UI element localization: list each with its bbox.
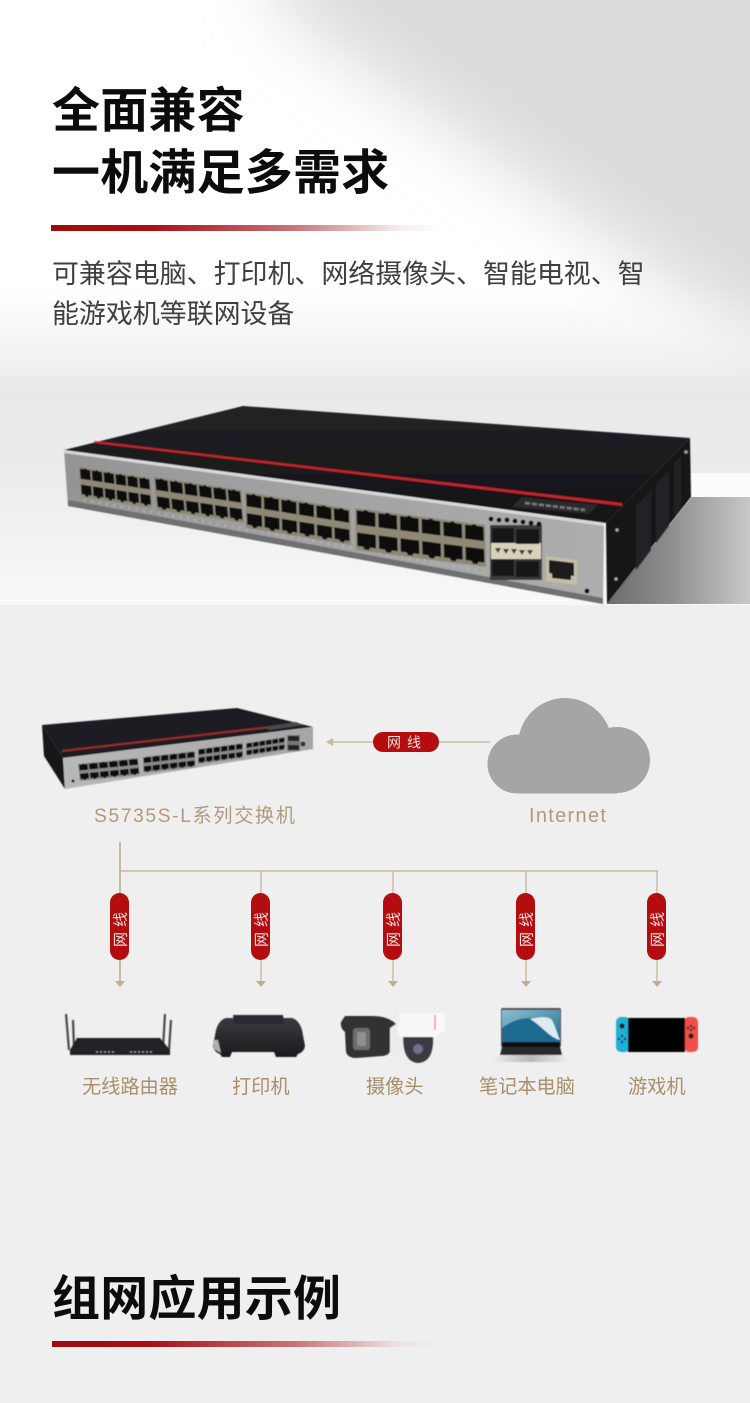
title: 一机满足多需求: 一机满足多需求 xyxy=(52,133,389,203)
heading: 组网应用示例: 组网应用示例 xyxy=(52,1259,341,1329)
small switch xyxy=(42,708,313,789)
cable pill 5: 网线 xyxy=(650,907,666,947)
icon: game console xyxy=(616,1017,698,1052)
switch side face xyxy=(606,438,691,604)
port group 2 xyxy=(154,477,244,523)
body text: 可兼容电脑、打印机、网络摄像头、智能电视、智 xyxy=(52,252,645,291)
title: 全面兼容: 全面兼容 xyxy=(52,71,245,141)
cable pill 2 xyxy=(251,893,270,960)
main switch product image xyxy=(64,406,691,604)
cable pill 4 xyxy=(516,893,536,960)
small switch body xyxy=(42,708,313,758)
device label: printer: 打印机 xyxy=(232,1076,290,1098)
small switch ports xyxy=(72,735,306,782)
icon: printer xyxy=(213,1015,305,1057)
cable pill 2: 网线 xyxy=(254,907,270,947)
switch top face xyxy=(64,406,690,523)
icon: cloud xyxy=(488,698,650,794)
cable pill 3 xyxy=(383,893,402,960)
cable pill 3: 网线 xyxy=(386,907,402,947)
icon: laptop xyxy=(489,1008,572,1062)
red divider bar xyxy=(51,225,443,231)
network tree lines xyxy=(120,842,658,982)
red divider bar bottom xyxy=(52,1341,444,1347)
arrowheads xyxy=(115,981,662,987)
device label: camera: 摄像头 xyxy=(366,1076,424,1098)
background xyxy=(0,0,750,605)
switch red stripe xyxy=(94,441,622,506)
body text xyxy=(52,252,645,331)
small switch red stripe xyxy=(62,723,297,752)
device label: game console: 游戏机 xyxy=(628,1076,686,1098)
body text: 能游戏机等联网设备 xyxy=(52,292,294,331)
Internet label: Internet xyxy=(529,805,607,827)
cable pill 1 xyxy=(110,893,130,960)
SFP block xyxy=(489,517,542,580)
cable pill: horizontal xyxy=(373,732,439,752)
port group 1 xyxy=(79,467,152,508)
cable pill 5 xyxy=(647,893,666,960)
switch label: S5735S-L系列交换机 xyxy=(94,805,297,827)
icon: security cameras xyxy=(341,1013,445,1063)
small switch logo xyxy=(262,722,303,730)
port group 3 xyxy=(245,492,351,545)
icon: wireless router xyxy=(66,1014,171,1055)
cable pill 4: 网线 xyxy=(518,907,536,947)
port group 4 xyxy=(355,508,486,567)
switch logo plate xyxy=(512,497,598,514)
small switch front panel xyxy=(63,727,313,789)
device label: laptop: 笔记本电脑 xyxy=(479,1076,575,1098)
arrow: cloud to switch xyxy=(326,738,490,746)
help dot xyxy=(585,589,589,593)
cable pill: horizontal: 网线 xyxy=(387,734,427,750)
device label: router: 无线路由器 xyxy=(82,1076,178,1098)
cable pill 1: 网线 xyxy=(112,907,130,947)
console port xyxy=(546,556,577,585)
switch front panel xyxy=(64,450,604,604)
